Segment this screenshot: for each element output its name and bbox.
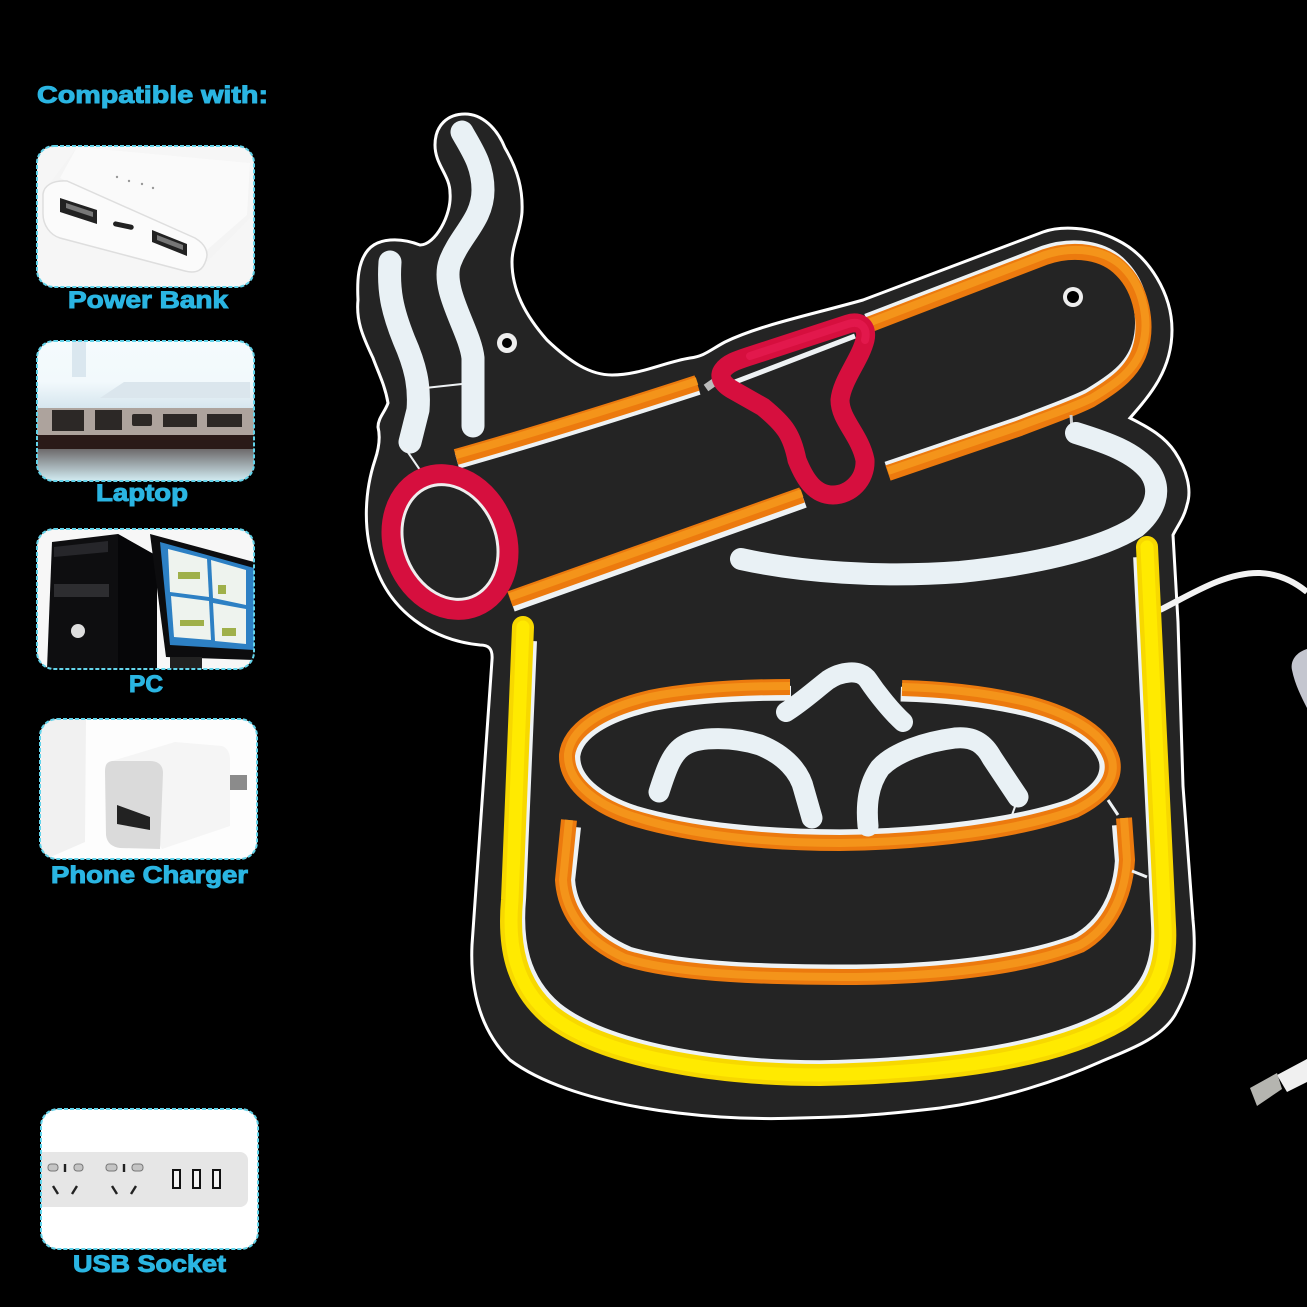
neon: cigar ring — [371, 456, 529, 628]
usb cable — [1160, 573, 1307, 1106]
mounting hole right — [1063, 287, 1083, 307]
label: power bank: Power Bank — [68, 287, 229, 314]
label: laptop: Laptop — [96, 480, 188, 507]
card: pc — [37, 529, 254, 669]
neon: cigar body — [456, 248, 1145, 604]
neon: dumplings — [659, 672, 1018, 826]
icon: outlets — [48, 1164, 143, 1171]
neon: cigar band — [706, 323, 866, 495]
neon sign acrylic panel — [358, 114, 1194, 1119]
card: usb socket — [30, 1109, 258, 1249]
card: power bank — [37, 146, 254, 287]
usb plug — [1250, 1059, 1307, 1106]
neon: smoke — [390, 132, 483, 470]
card: laptop — [37, 341, 254, 481]
icon: pc tower — [47, 534, 157, 669]
mounting hole left — [497, 333, 517, 353]
neon: steamer base — [563, 800, 1147, 977]
neon: cup rim — [741, 415, 1156, 574]
card: phone charger — [40, 719, 257, 859]
icon: usb ports — [60, 198, 187, 256]
icon: usb slots — [173, 1170, 220, 1188]
icon: laptop ports — [52, 410, 242, 431]
neon: steamer lid — [567, 686, 1113, 843]
label: pc: PC — [129, 671, 163, 698]
icon: monitor — [150, 534, 254, 669]
label: usb socket: USB Socket — [73, 1251, 226, 1278]
icon: charger — [105, 761, 247, 849]
indicator dots — [116, 176, 154, 189]
label: phone charger: Phone Charger — [51, 862, 248, 889]
heading: compatible with: Compatible with: — [37, 82, 268, 109]
inline switch — [1292, 649, 1307, 708]
neon: cup yellow outline — [511, 547, 1165, 1075]
